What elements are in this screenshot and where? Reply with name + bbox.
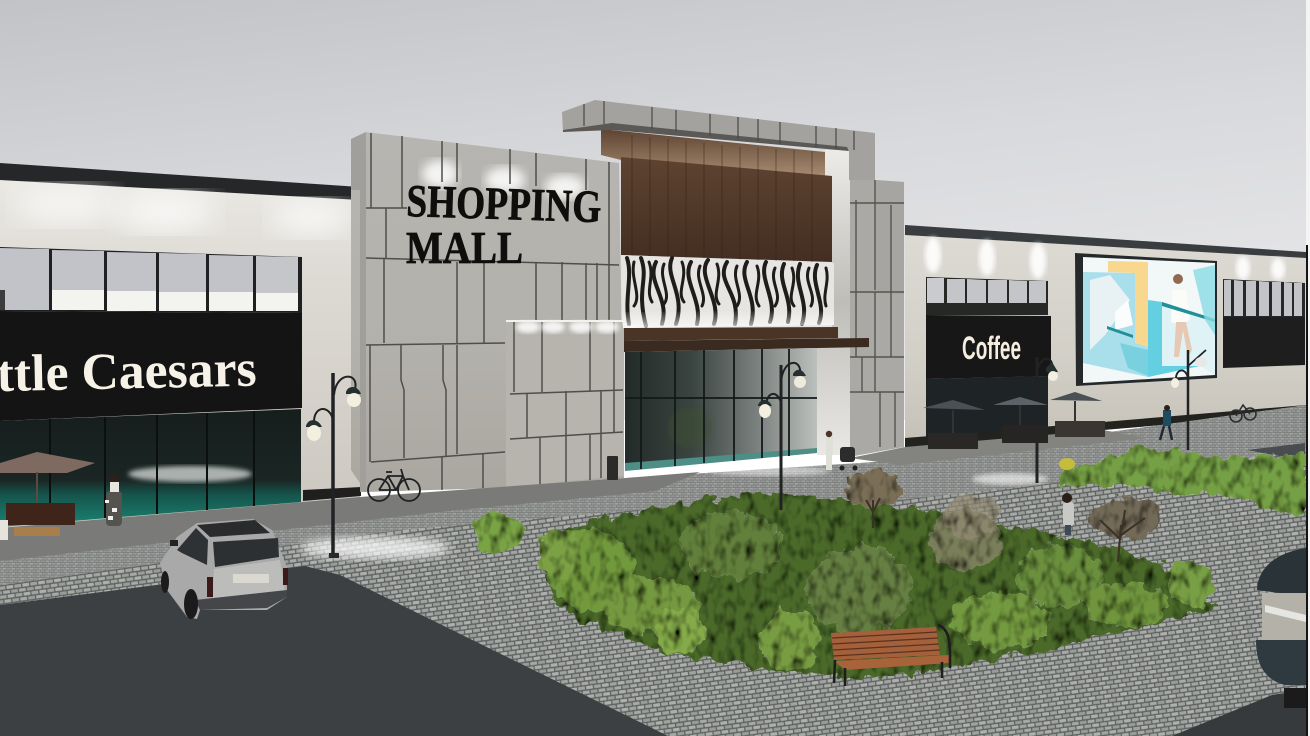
building: left wing: [0, 163, 361, 530]
coffee shop sign: [926, 315, 1051, 379]
ground: far cobblestone: [0, 405, 1306, 585]
people: [105, 405, 1172, 535]
far right sign: [1223, 317, 1305, 368]
recess wall: [817, 150, 850, 455]
right sidewalk: [850, 430, 1147, 465]
Little Caesars sign: [0, 311, 302, 421]
bench: [831, 625, 950, 686]
left sidewalk: [0, 472, 700, 561]
bicycle far right: [1230, 405, 1256, 422]
asphalt corner: [1172, 690, 1306, 736]
ground: cobblestone: [0, 420, 1306, 736]
entrance glazing: [625, 348, 817, 471]
planting island: [538, 495, 1216, 679]
car: silver SUV: [160, 519, 288, 619]
sign: shopping mall: MALL: [406, 222, 523, 273]
trash bin: [607, 456, 618, 480]
sky: [0, 0, 1306, 420]
billboard: [1075, 253, 1217, 386]
small shrub: [472, 512, 524, 552]
street lamp center: [758, 363, 806, 510]
store windows: [0, 247, 302, 313]
sign: shopping mall: SHOPPING: [406, 175, 602, 232]
cafe umbrellas: [923, 392, 1105, 449]
side pier: [849, 133, 904, 457]
building: right wing: [905, 225, 1306, 450]
bicycle: [368, 469, 420, 501]
coffee shop sign: Coffee: [962, 330, 1021, 366]
entrance canopy: [624, 327, 869, 352]
car: partial vehicle right: [1256, 548, 1306, 708]
far right windows: [1223, 279, 1305, 317]
asphalt parking: [0, 566, 668, 736]
trees: [846, 470, 1161, 562]
wood canopy wall: [601, 129, 832, 262]
sign: shopping mall: [406, 175, 602, 273]
ground light pool: [300, 537, 450, 559]
coffee shop windows: [926, 277, 1048, 315]
street lamp left: [306, 373, 361, 558]
image edge strip: [1306, 0, 1310, 736]
patterned screen: [621, 255, 834, 328]
store glazing: [0, 409, 301, 527]
entrance tower: [351, 132, 624, 492]
street lamp far right: [1171, 350, 1207, 450]
street lamp right: [1037, 357, 1058, 483]
outdoor seating left: [0, 452, 95, 540]
coffee shop glazing: [926, 376, 1048, 438]
canopy roof: [562, 100, 875, 180]
far road: [1247, 443, 1305, 460]
Little Caesars sign: ttle Caesars: [0, 341, 257, 403]
hedge right: [1059, 445, 1305, 517]
lower cladding block: [506, 320, 624, 487]
